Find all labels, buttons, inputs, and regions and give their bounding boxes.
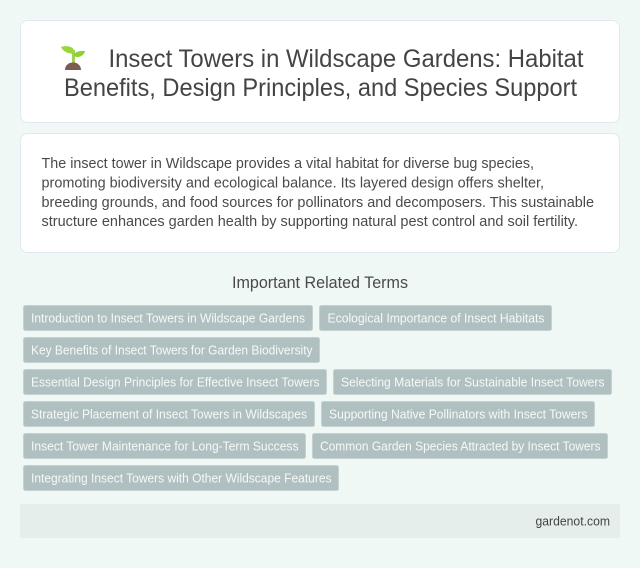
- footer band: [20, 504, 620, 538]
- tag: [24, 338, 320, 362]
- tag: Key Benefits of Insect Towers for Garden Biodiversity: [31, 342, 313, 358]
- tag: [334, 370, 612, 394]
- tag: [24, 370, 326, 394]
- heading: related terms: Important Related Terms: [232, 274, 408, 292]
- tag: Ecological Importance of Insect Habitats: [328, 310, 545, 326]
- tag: Strategic Placement of Insect Towers in Wildscapes: [31, 406, 307, 422]
- tag: Introduction to Insect Towers in Wildscape Gardens: [31, 310, 305, 326]
- tag: [24, 434, 306, 458]
- tag: Supporting Native Pollinators with Insect Towers: [329, 406, 588, 422]
- text block: description: promoting biodiversity and ecological balance. Its layered design offers shelter,: [42, 174, 544, 192]
- tag: Selecting Materials for Sustainable Insect Towers: [341, 374, 605, 390]
- title: Insect Towers in Wildscape Gardens: Habitat: [108, 45, 584, 73]
- tag: [24, 466, 338, 490]
- tag: [322, 402, 594, 426]
- tag: Insect Tower Maintenance for Long-Term Success: [31, 438, 299, 454]
- title: [64, 45, 584, 102]
- tag: Essential Design Principles for Effective Insect Towers: [31, 374, 320, 390]
- tag: Integrating Insect Towers with Other Wildscape Features: [31, 470, 332, 486]
- tag: Common Garden Species Attracted by Insect Towers: [320, 438, 601, 454]
- tag list: [24, 306, 612, 490]
- tag: [312, 434, 608, 458]
- text block: description: [42, 155, 594, 230]
- tag: [24, 402, 314, 426]
- text block: description: breeding grounds, and food sources for pollinators and decomposers. This sustainable: [42, 194, 594, 211]
- text block: description: The insect tower in Wildscape provides a vital habitat for diverse bug species,: [42, 155, 534, 172]
- footer credit: gardenot.com: [536, 514, 610, 528]
- tag: [320, 306, 552, 330]
- title: Benefits, Design Principles, and Species Support: [64, 74, 577, 102]
- panel: title card: [20, 20, 620, 122]
- tag: [24, 306, 312, 330]
- panel: description: [20, 134, 620, 252]
- text block: description: structure enhances garden health by supporting natural pest control and soil fertility.: [42, 213, 578, 230]
- icon: seedling: [61, 46, 85, 70]
